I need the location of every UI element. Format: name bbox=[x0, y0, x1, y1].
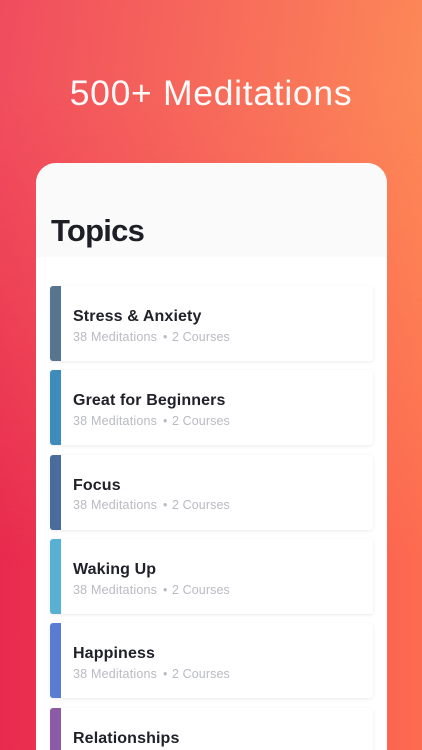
card: Focus: 2 Courses bbox=[172, 498, 230, 512]
card: Happiness bbox=[50, 623, 373, 698]
card: Stress & Anxiety: Stress & Anxiety bbox=[73, 308, 202, 325]
card: Waking Up: 38 Meditations bbox=[73, 583, 157, 597]
card: Focus: Focus bbox=[73, 477, 121, 494]
card: Great for Beginners: 2 Courses bbox=[172, 414, 230, 428]
card: Waking Up: Waking Up bbox=[73, 561, 156, 578]
heading: Topics: Topics bbox=[51, 213, 144, 248]
background gradient: top orange glow bbox=[0, 0, 422, 469]
panel: topics screen bbox=[36, 163, 387, 750]
card: Stress & Anxiety: 2 Courses bbox=[172, 330, 230, 344]
card: Focus bbox=[50, 455, 373, 530]
card: Happiness: • bbox=[163, 667, 168, 681]
header band bbox=[36, 163, 387, 257]
card: Relationships bbox=[50, 708, 373, 750]
card: Waking Up bbox=[50, 539, 373, 614]
card: Focus: • bbox=[163, 498, 168, 512]
card: Great for Beginners bbox=[50, 370, 373, 445]
card: Happiness: Happiness bbox=[73, 645, 155, 662]
card: Waking Up: 2 Courses bbox=[172, 583, 230, 597]
card: Happiness: 38 Meditations bbox=[73, 667, 157, 681]
card: Waking Up: • bbox=[163, 583, 168, 597]
card: Stress & Anxiety bbox=[50, 286, 373, 361]
card: Stress & Anxiety: 38 Meditations bbox=[73, 330, 157, 344]
card: Great for Beginners: 38 Meditations bbox=[73, 414, 157, 428]
card: Focus: 38 Meditations bbox=[73, 498, 157, 512]
card: Relationships: Relationships bbox=[73, 730, 179, 747]
card: Stress & Anxiety: • bbox=[163, 330, 168, 344]
card: Great for Beginners: • bbox=[163, 414, 168, 428]
card: Great for Beginners: Great for Beginners bbox=[73, 392, 226, 409]
card: Happiness: 2 Courses bbox=[172, 667, 230, 681]
title: 500+ Meditations bbox=[70, 73, 352, 113]
